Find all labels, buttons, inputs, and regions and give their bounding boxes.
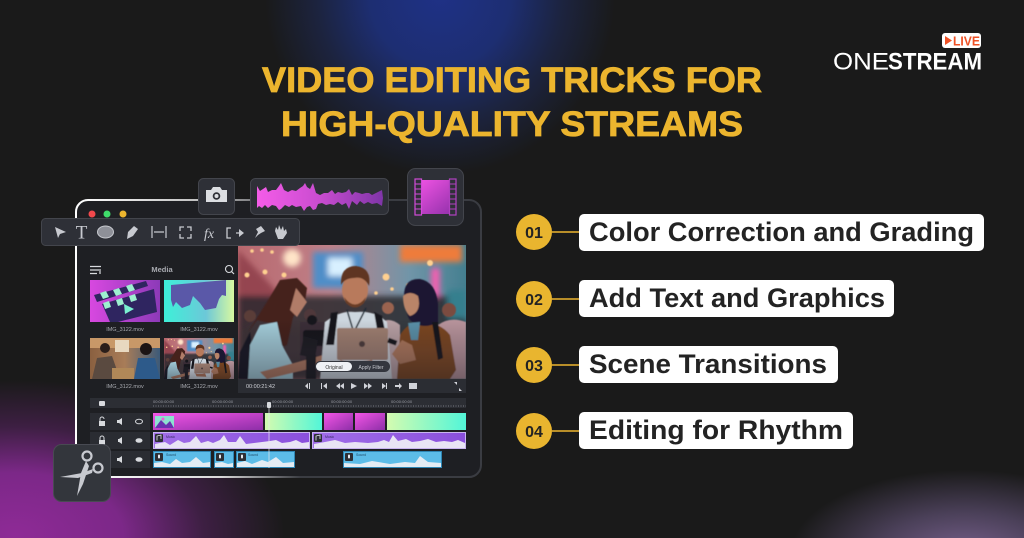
file name: IMG_3122.mov (180, 384, 218, 390)
media header (90, 265, 234, 274)
item 02 (516, 280, 894, 317)
tool bar (42, 218, 300, 246)
title: VIDEO EDITING TRICKS FOR (262, 61, 762, 100)
tool bar: fx (204, 227, 215, 242)
timeline ruler: 00:00:00:00 (331, 399, 353, 404)
badge 04: 04 (525, 424, 543, 441)
filter toggle: Apply Filter (358, 365, 384, 371)
editor window (76, 200, 481, 477)
file name: IMG_3122.mov (106, 327, 144, 333)
waveform tile (250, 178, 388, 214)
media header: Media (151, 265, 173, 274)
logo: OneStream Live (833, 33, 982, 76)
icon: film strip tile (408, 168, 464, 226)
thumbnail: clapperboard (90, 280, 160, 322)
icon: camera tile (198, 178, 234, 214)
sound track: Sound (248, 453, 258, 457)
filter toggle: Original (325, 365, 343, 371)
background people (244, 302, 466, 379)
timeline ruler (90, 398, 466, 408)
item 04 (516, 412, 853, 449)
tool bar: T (76, 222, 88, 244)
title (262, 61, 762, 144)
item 01 (516, 214, 984, 251)
logo: OneStream Live: ONE (833, 48, 889, 76)
item 03 (516, 346, 838, 383)
timeline ruler: 00:00:00:00 (153, 399, 175, 404)
player controls (238, 379, 466, 393)
badge 02: 02 (525, 292, 543, 309)
clip thumbnail (155, 416, 174, 428)
track controls (90, 413, 150, 468)
badge 02 (516, 281, 552, 317)
badge 03: 03 (525, 358, 543, 375)
timeline ruler: 00:00:00:00 (272, 399, 294, 404)
media panel (90, 265, 234, 390)
icon: scissors tile (54, 444, 110, 502)
filter toggle (315, 361, 390, 372)
badge 01 (516, 214, 552, 250)
file name: IMG_3122.mov (180, 327, 218, 333)
music track: Music (325, 435, 334, 439)
window controls (88, 210, 126, 218)
label 04: Editing for Rhythm (589, 415, 843, 445)
music track (154, 432, 466, 448)
logo: OneStream Live: STREAM (888, 48, 982, 76)
label 03: Scene Transitions (589, 349, 827, 379)
badge 04 (516, 413, 552, 449)
badge 01: 01 (525, 225, 543, 242)
video preview photo (238, 245, 466, 380)
man with laptop (320, 266, 392, 379)
thumbnail: crowd (164, 338, 234, 379)
file name: IMG_3122.mov (106, 384, 144, 390)
badge 03 (516, 347, 552, 383)
playhead (267, 402, 271, 468)
sound track: Sound (356, 453, 366, 457)
timeline ruler: 00:00:00:00 (391, 399, 413, 404)
music track: Music (166, 435, 175, 439)
label 01: Color Correction and Grading (589, 217, 974, 247)
video track (153, 413, 466, 430)
player controls: 00:00:21:42 (246, 384, 275, 390)
logo: OneStream Live: LIVE (953, 34, 980, 48)
thumbnail: waveform (164, 280, 234, 322)
timeline ruler: 00:00:00:00 (212, 399, 234, 404)
woman with camera (238, 278, 337, 379)
camera (300, 315, 331, 379)
woman in hijab (387, 279, 456, 379)
label 02: Add Text and Graphics (589, 283, 885, 313)
title: HIGH-QUALITY STREAMS (281, 105, 743, 144)
sound track: Sound (166, 453, 176, 457)
thumbnail: market (90, 338, 160, 379)
sound track (154, 452, 442, 468)
